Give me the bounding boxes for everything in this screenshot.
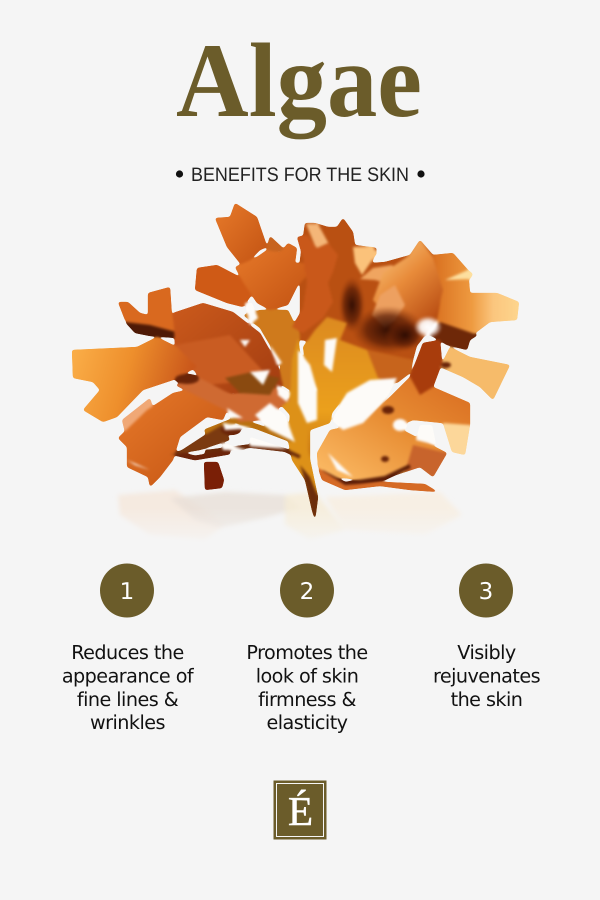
left fronds xyxy=(118,287,176,332)
spots and dark markings xyxy=(175,362,451,462)
benefit 1 text: wrinkles xyxy=(90,711,166,734)
back fronds right xyxy=(300,218,443,360)
number badge 2 xyxy=(280,564,334,618)
benefit 3 text: Visibly xyxy=(457,641,516,664)
gaps in the fronds xyxy=(127,303,436,477)
logo: É xyxy=(288,788,313,834)
benefit 1 text: fine lines & xyxy=(77,688,179,711)
benefit 2 text: Promotes the xyxy=(246,641,368,664)
benefit 2 text xyxy=(246,641,368,734)
benefit 1 text xyxy=(62,641,195,734)
benefit 3 text xyxy=(433,641,541,711)
subtitle: BENEFITS FOR THE SKIN xyxy=(191,164,409,186)
algae illustration xyxy=(72,203,519,520)
benefit 2 text: look of skin xyxy=(256,664,358,688)
benefit 3 xyxy=(433,564,541,711)
top center fronds xyxy=(215,203,267,267)
benefit 3 text: the skin xyxy=(451,688,522,711)
lower right leaf xyxy=(317,340,470,480)
benefit 1 text: Reduces the xyxy=(71,641,184,664)
number badge 3: 3 xyxy=(479,579,493,605)
number badge 2: 2 xyxy=(300,579,314,605)
number badge 1: 1 xyxy=(120,579,134,605)
benefit 1 text: appearance of xyxy=(62,664,195,688)
benefit 1 xyxy=(62,564,195,734)
glare xyxy=(414,316,442,338)
right arm frond xyxy=(440,347,510,400)
benefit 2 text: firmness & xyxy=(258,688,357,711)
algae reflection xyxy=(90,490,490,550)
title: Algae xyxy=(176,22,422,140)
stem and branches xyxy=(170,310,438,520)
benefit 3 text: rejuvenates xyxy=(433,664,541,688)
number badge 3 xyxy=(459,564,513,618)
benefit 2 xyxy=(246,564,368,734)
yellow body xyxy=(290,317,413,473)
number badge 1 xyxy=(100,564,154,618)
logo xyxy=(274,780,326,840)
benefit 2 text: elasticity xyxy=(266,711,348,734)
